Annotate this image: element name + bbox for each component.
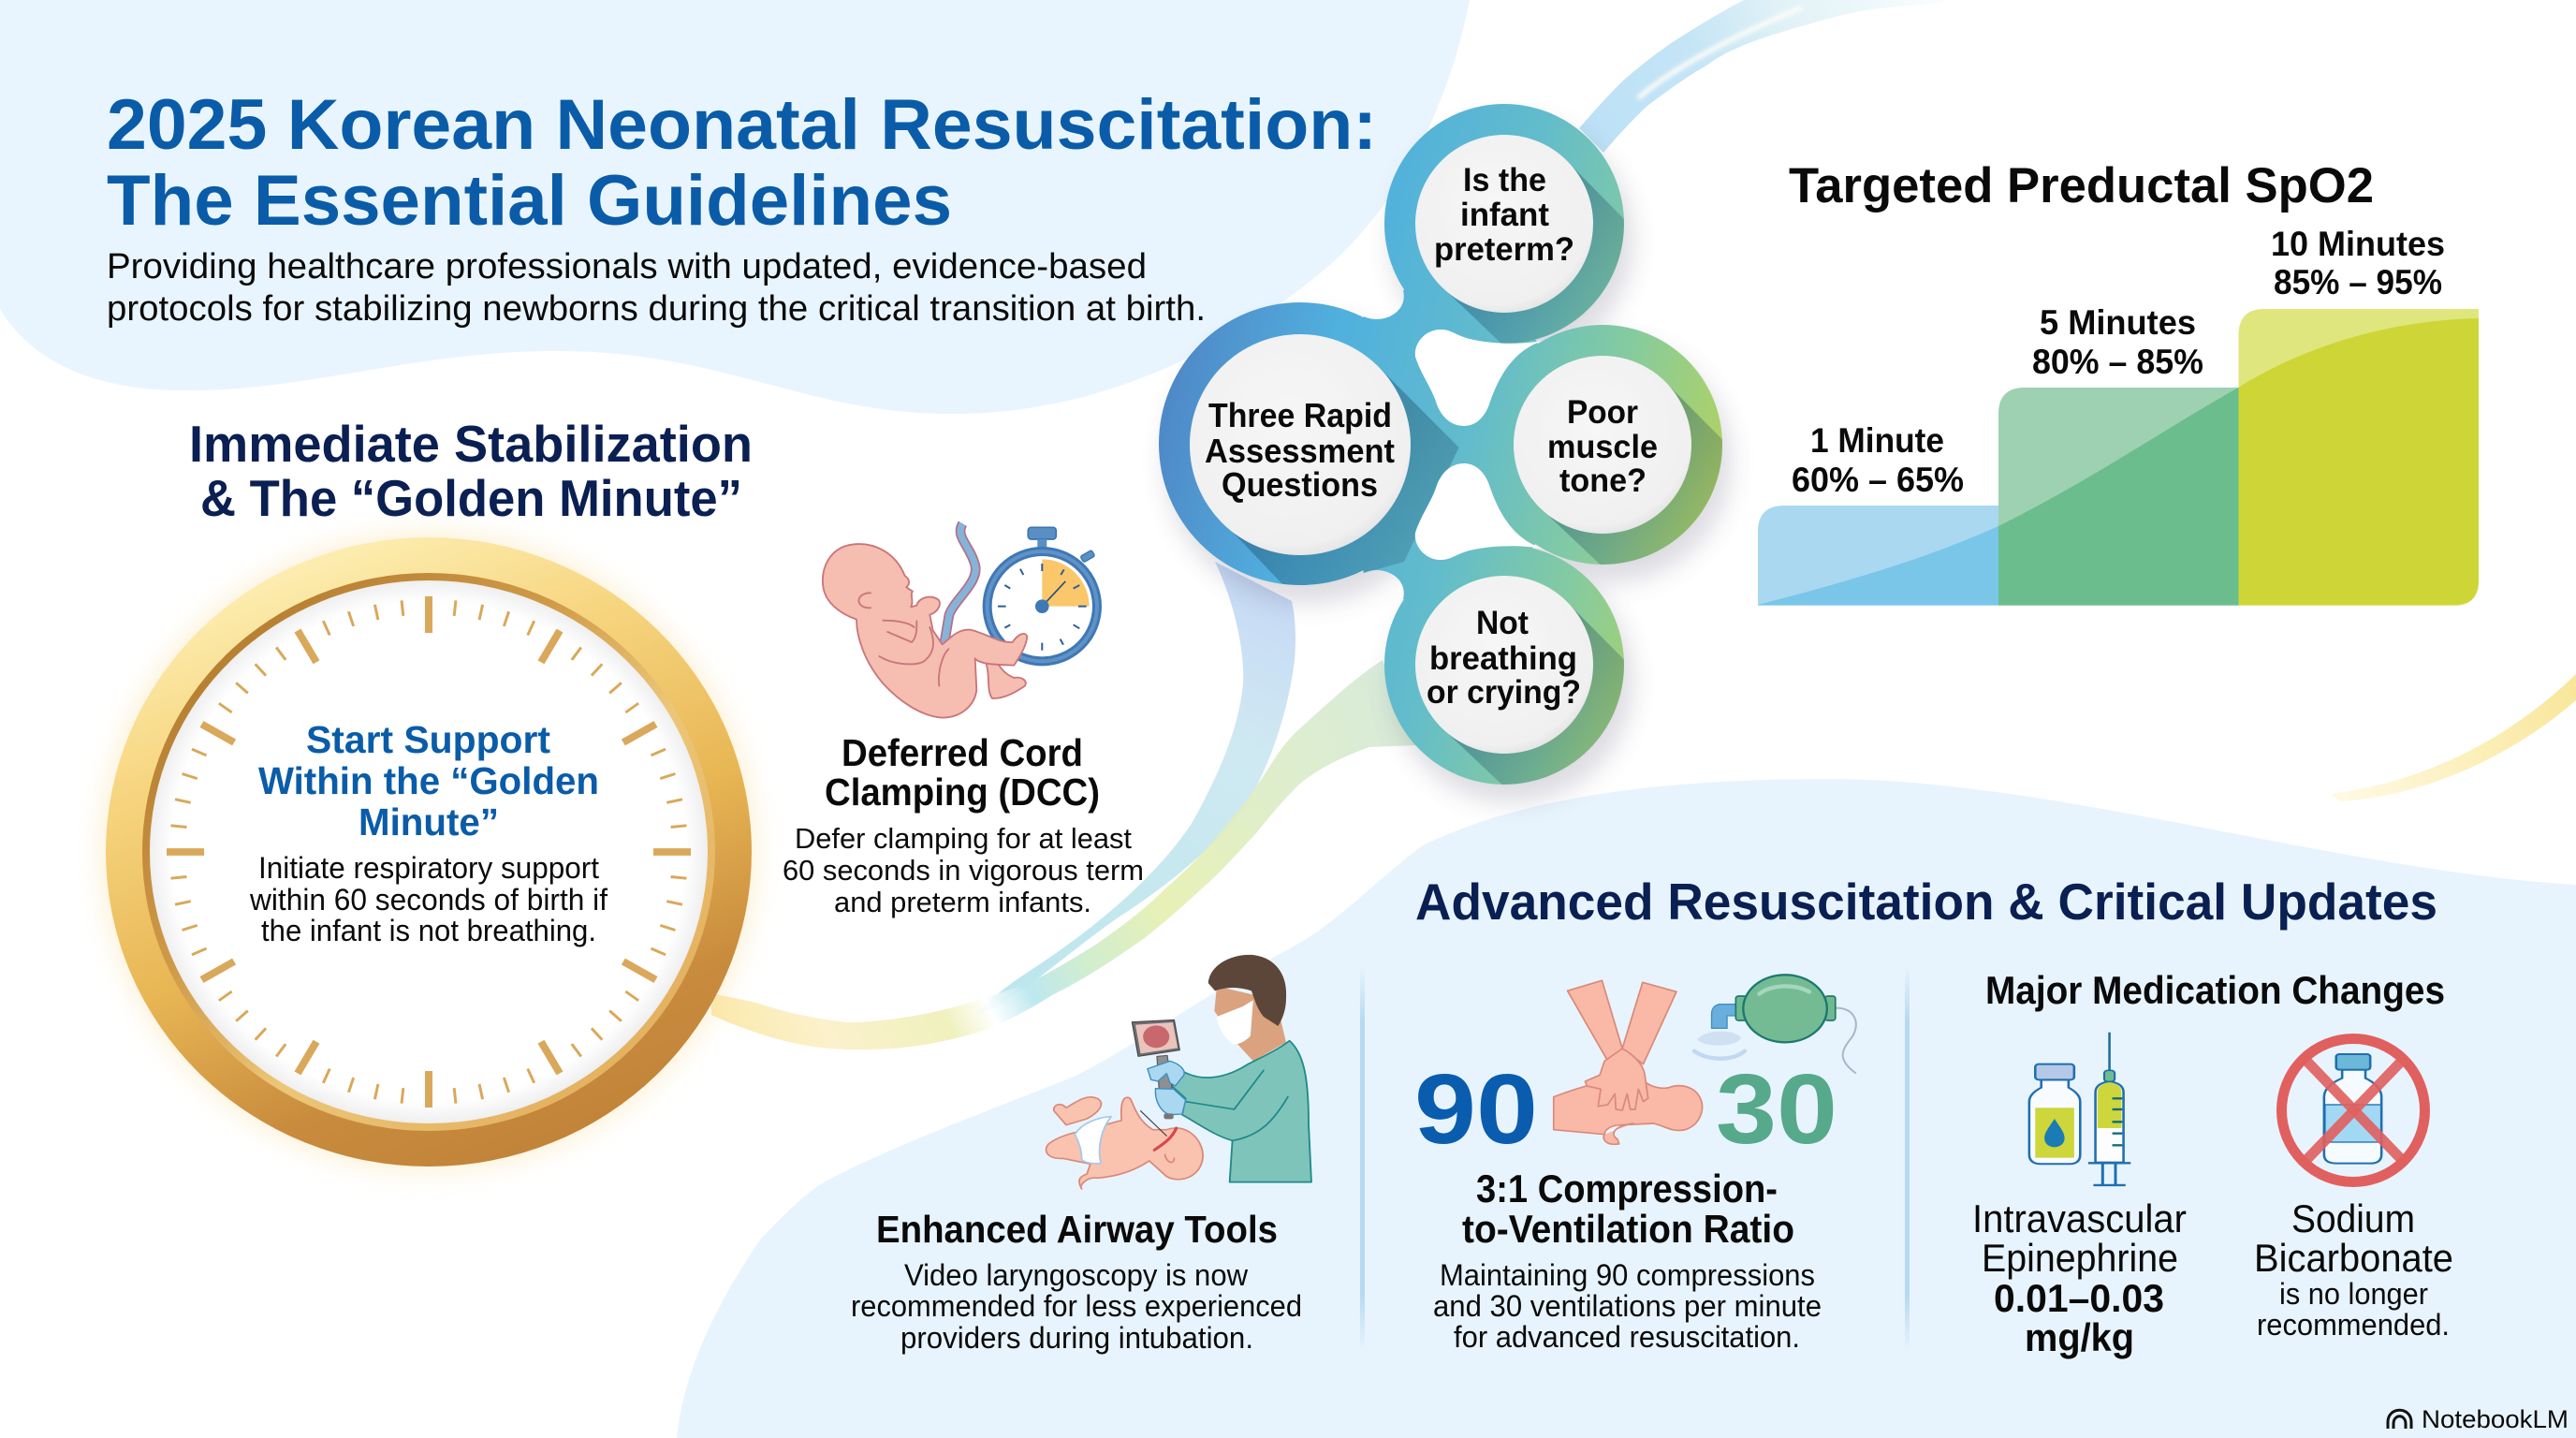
heading: major medication changes: Major Medication Changes xyxy=(1985,968,2445,1012)
label: 5 minutes: 5 Minutes xyxy=(2040,303,2196,342)
text: enhanced airway tools: recommended for less experienced xyxy=(851,1289,1302,1323)
text: deferred cord clamping: Defer clamping for at least xyxy=(795,822,1132,855)
question node: muscle tone: muscle xyxy=(1547,429,1658,465)
text: sodium bicarbonate xyxy=(2254,1196,2453,1342)
label: 1 minute: 60% – 65% xyxy=(1792,461,1964,499)
text: compression ratio: 3:1 Compression- xyxy=(1476,1167,1778,1211)
step bar: 1 minute xyxy=(1758,506,1998,606)
question node: preterm: preterm? xyxy=(1434,231,1574,268)
network shape xyxy=(1159,104,1730,801)
question node: breathing xyxy=(1415,576,1593,754)
vial xyxy=(2029,1064,2080,1164)
title: 2025 Korean Neonatal Resuscitation: xyxy=(107,85,1377,165)
text: sodium bicarbonate: Sodium xyxy=(2291,1196,2415,1240)
label: 1 minute xyxy=(1792,421,1964,499)
syringe xyxy=(2088,1033,2130,1185)
question node: muscle tone xyxy=(1514,356,1691,534)
centre node: Three Rapid xyxy=(1208,396,1392,434)
background blob: top left xyxy=(0,0,1470,414)
text: deferred cord clamping: 60 seconds in vigorous term xyxy=(783,854,1144,887)
ribbon: lower right xyxy=(2331,674,2576,801)
clock heading: Minute” xyxy=(359,800,499,844)
text: enhanced airway tools: Video laryngoscopy is now xyxy=(904,1258,1249,1292)
heading: advanced resuscitation: Advanced Resuscitation & Critical Updates xyxy=(1415,873,2437,931)
question node: muscle tone: tone? xyxy=(1559,462,1647,499)
text: sodium bicarbonate: is no longer xyxy=(2279,1277,2428,1311)
rising curve overlay xyxy=(1758,318,2479,605)
baby patient xyxy=(1046,1097,1203,1189)
stopwatch xyxy=(988,527,1097,661)
label: 10 minutes: 10 Minutes xyxy=(2271,225,2445,263)
heading: immediate stabilization xyxy=(189,415,753,527)
umbilical cord xyxy=(944,523,975,646)
notebooklm logo: NotebookLM xyxy=(2422,1405,2569,1433)
title xyxy=(107,85,1377,241)
ribbon: green yellow to clock xyxy=(711,660,1419,1049)
network gaps xyxy=(1415,330,1543,560)
assessment network xyxy=(1157,104,1739,811)
golden minute clock xyxy=(101,533,756,1171)
label: 10 minutes: 85% – 95% xyxy=(2274,263,2442,301)
clock heading: Start Support xyxy=(306,718,550,761)
bottle xyxy=(2324,1054,2381,1164)
background blob: bottom right xyxy=(677,779,2576,1438)
compression ratio: 30: 30 xyxy=(1716,1054,1837,1165)
clock description: within 60 seconds of birth if xyxy=(249,883,607,917)
text: deferred cord clamping xyxy=(783,731,1144,918)
clock tick marks xyxy=(167,596,691,1108)
subtitle xyxy=(107,247,1206,329)
icon: epinephrine vial and syringe xyxy=(2029,1033,2130,1185)
ribbon: top right xyxy=(1579,0,1950,153)
text: sodium bicarbonate: Bicarbonate xyxy=(2254,1236,2453,1280)
subtitle: Providing healthcare professionals with updated, evidence-based xyxy=(107,247,1147,286)
question node: preterm xyxy=(1415,135,1593,313)
step bar: 10 minutes xyxy=(2239,309,2479,606)
clock heading xyxy=(258,718,599,844)
title: The Essential Guidelines xyxy=(107,161,952,241)
centre node: Questions xyxy=(1222,465,1378,504)
icon: doctor intubating baby xyxy=(1046,955,1311,1189)
video laryngoscope xyxy=(1132,1020,1186,1119)
clock description: the infant is not breathing. xyxy=(261,914,596,947)
subtitle: protocols for stabilizing newborns during the critical transition at birth. xyxy=(107,289,1206,329)
doctor xyxy=(1172,955,1311,1182)
text: enhanced airway tools: providers during intubation. xyxy=(900,1321,1253,1355)
text: epinephrine dose: Epinephrine xyxy=(1982,1236,2178,1280)
question node: breathing: Not xyxy=(1476,605,1529,641)
text: compression ratio: Maintaining 90 compressions xyxy=(1440,1258,1815,1292)
ventilation bag xyxy=(1694,975,1856,1073)
text: deferred cord clamping: Deferred Cord xyxy=(842,731,1083,774)
ribbon: blue centre xyxy=(973,562,1295,1016)
icon: chest compressions and ventilation bag xyxy=(1554,975,1856,1144)
text: epinephrine dose: 0.01–0.03 xyxy=(1994,1276,2164,1320)
centre node xyxy=(1190,334,1411,555)
label: 10 minutes xyxy=(2271,225,2445,301)
heading: immediate stabilization: Immediate Stabilization xyxy=(189,415,753,473)
heading: targeted preductal spo2: Targeted Preductal SpO2 xyxy=(1789,158,2374,213)
label: 5 minutes: 80% – 85% xyxy=(2032,343,2203,381)
compression ratio: 90: 90 xyxy=(1414,1054,1538,1165)
centre node: Assessment xyxy=(1205,432,1395,470)
step chart: spo2 targets xyxy=(1758,225,2479,609)
question node: muscle tone: Poor xyxy=(1567,394,1638,431)
text: epinephrine dose: mg/kg xyxy=(2025,1315,2134,1359)
question node: breathing: breathing xyxy=(1429,640,1577,677)
text: epinephrine dose: Intravascular xyxy=(1972,1196,2187,1240)
label: 1 minute: 1 Minute xyxy=(1810,421,1944,460)
heading: immediate stabilization: & The “Golden Minute” xyxy=(200,469,742,527)
clock heading: Within the “Golden xyxy=(258,759,599,802)
text: epinephrine dose xyxy=(1972,1196,2187,1359)
clock description xyxy=(249,851,607,947)
text: sodium bicarbonate: recommended. xyxy=(2257,1308,2450,1342)
text: compression ratio xyxy=(1433,1167,1822,1354)
text: compression ratio: to-Ventilation Ratio xyxy=(1462,1207,1794,1251)
text: deferred cord clamping: and preterm infants. xyxy=(834,886,1091,918)
text: deferred cord clamping: Clamping (DCC) xyxy=(825,770,1100,814)
text: enhanced airway tools xyxy=(851,1208,1302,1355)
icon: baby with umbilical cord and stopwatch xyxy=(823,523,1097,718)
clock description: Initiate respiratory support xyxy=(258,851,599,885)
question node: preterm: Is the xyxy=(1463,162,1546,198)
text: compression ratio: for advanced resuscitation. xyxy=(1454,1320,1800,1354)
question node: preterm: infant xyxy=(1460,197,1549,233)
long shadows xyxy=(1222,161,1783,843)
baby xyxy=(823,544,1027,718)
text: enhanced airway tools: Enhanced Airway Tools xyxy=(876,1208,1278,1251)
chest compression hands xyxy=(1554,980,1702,1144)
step bar: 5 minutes xyxy=(1998,388,2239,606)
label: 5 minutes xyxy=(2032,303,2203,381)
text: compression ratio: and 30 ventilations per minute xyxy=(1433,1289,1822,1323)
icon: sodium bicarbonate prohibited xyxy=(2282,1039,2424,1181)
question node: breathing: or crying? xyxy=(1427,674,1581,711)
